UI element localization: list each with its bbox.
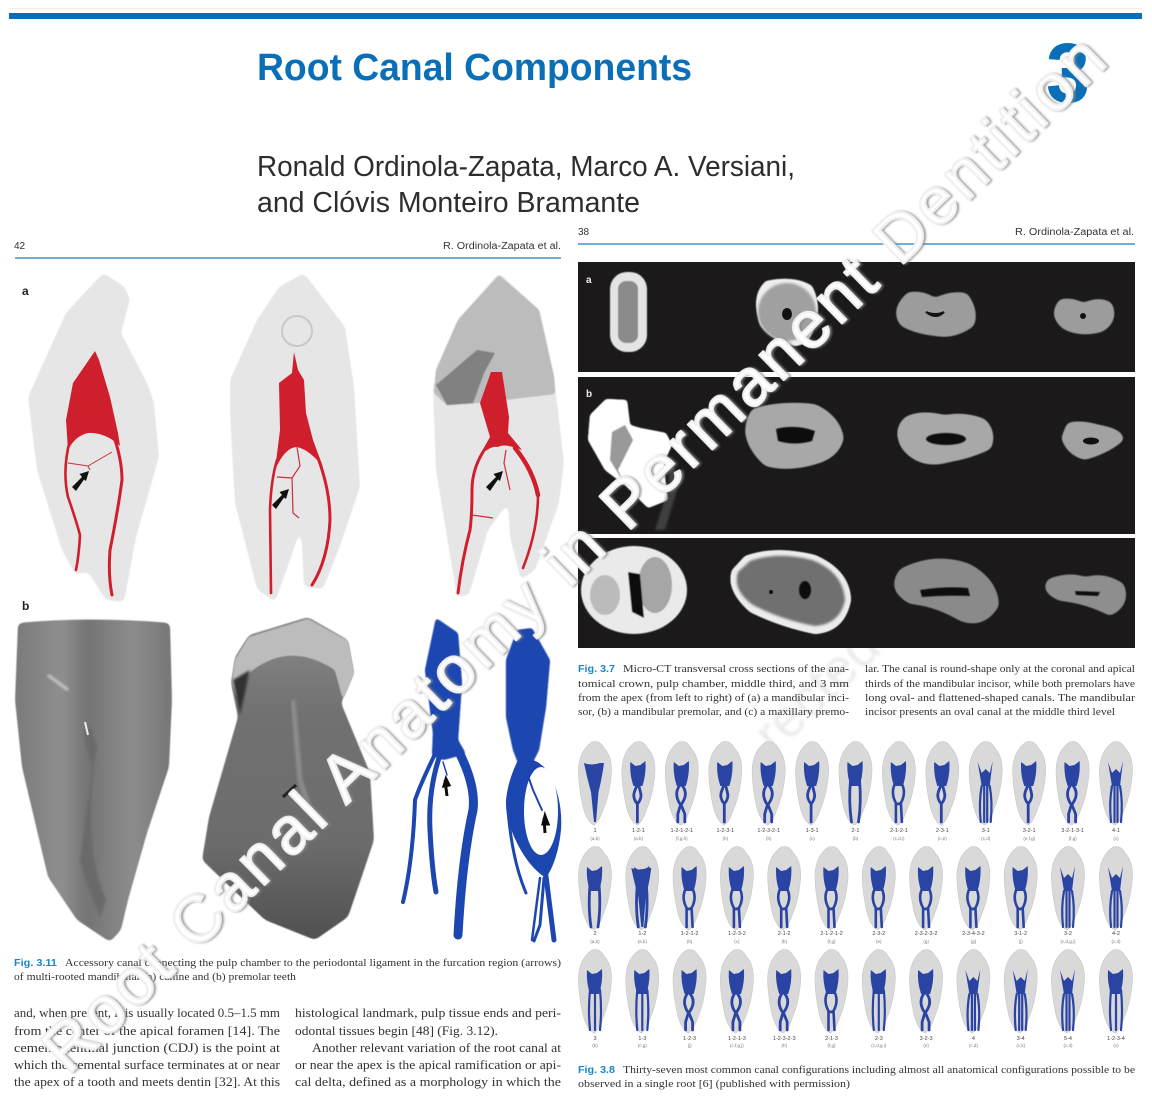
row 3 of configurations bbox=[578, 950, 1133, 1048]
caption: Fig. 3.8 bbox=[578, 1065, 1135, 1090]
label b: b bbox=[22, 599, 29, 613]
row 2 of configurations: (a,b) bbox=[590, 939, 600, 944]
caption: Fig. 3.7: tomical crown, pulp chamber, middle third, and 3 mm bbox=[578, 679, 849, 690]
row 2 of configurations: 4-2 bbox=[1112, 931, 1120, 937]
row 3 of configurations: (c,k) bbox=[1016, 1043, 1026, 1048]
blue canal 1 bbox=[403, 618, 473, 935]
body text right column bbox=[295, 1005, 561, 1089]
caption: Fig. 3.8: Thirty-seven most common canal configurations including almost all anatomical configurations possible to be bbox=[623, 1065, 1135, 1076]
chapter header band bbox=[9, 8, 1142, 19]
row 1 of configurations: (f,g,h) bbox=[676, 836, 688, 841]
caption: Fig. 3.7: from the apex (from left to right) of (a) a mandibular inci- bbox=[578, 693, 850, 704]
caption: Fig. 3.7: sor, (b) a mandibular premolar, and (c) a maxillary premo- bbox=[578, 707, 850, 718]
label a: a bbox=[22, 284, 29, 298]
label a: a bbox=[586, 275, 592, 286]
row 2 of configurations: (a,b) bbox=[638, 939, 647, 944]
row 1 of configurations: (a,b) bbox=[634, 836, 644, 841]
authors bbox=[257, 151, 795, 219]
row 1 of configurations: (b) bbox=[853, 836, 859, 841]
left page running head: R. Ordinola-Zapata et al. bbox=[443, 241, 561, 252]
row 2 of configurations: 3-1-2 bbox=[1014, 931, 1027, 937]
row 2 of configurations: 2-3-2 bbox=[872, 931, 885, 937]
row 1 of configurations: 1-2-1-2-1 bbox=[670, 828, 693, 834]
section: pulp chamber bbox=[730, 550, 851, 634]
canal configuration grid bbox=[578, 742, 1133, 1048]
dark grey tooth bbox=[202, 617, 374, 940]
row 3 of configurations: 4 bbox=[972, 1036, 975, 1042]
row 1 of configurations: (c) bbox=[1113, 836, 1119, 841]
row 3 of configurations: (c,d) bbox=[969, 1043, 978, 1048]
row 1 of configurations: (c,e) bbox=[938, 836, 947, 841]
section: apical bbox=[1061, 421, 1124, 460]
body text left column bbox=[14, 1005, 281, 1089]
body text right column: Another relevant variation of the root canal at bbox=[312, 1040, 561, 1055]
row 1 of configurations bbox=[578, 742, 1133, 841]
row 2 of configurations: (f,g) bbox=[827, 939, 836, 944]
row 3 of configurations: (c,f,g,j) bbox=[730, 1043, 744, 1048]
title: Root Canal Components bbox=[257, 47, 692, 89]
body text right column: or near the apex is the apical ramification or api- bbox=[295, 1057, 561, 1072]
caption: Fig. 3.11: Accessory canal connecting the pulp chamber to the periodontal ligament in the furcation region (arrows) bbox=[65, 958, 562, 969]
panel a: red canal teeth bbox=[22, 273, 564, 602]
row 1 of configurations: 1-3-1 bbox=[806, 828, 819, 834]
row 2 of configurations: (c,d,g,i) bbox=[1060, 939, 1076, 944]
caption: Fig. 3.7: lar. The canal is round-shape only at the coronal and apical bbox=[865, 664, 1135, 675]
caption: Fig. 3.8: Fig. 3.8 bbox=[578, 1065, 615, 1076]
row 1 of configurations: 2-1-2-1 bbox=[890, 828, 908, 834]
section: crown bbox=[610, 272, 647, 352]
row 2 of configurations: (b) bbox=[687, 939, 693, 944]
right page running head: R. Ordinola-Zapata et al. bbox=[1015, 227, 1134, 238]
body text right column: cal delta, defined as a morphology in which the bbox=[295, 1074, 561, 1089]
row 3 of configurations: (f,g) bbox=[827, 1043, 836, 1048]
row 3 of configurations: 2-1-3 bbox=[825, 1036, 838, 1042]
panel b: grey teeth and blue canals bbox=[15, 599, 561, 942]
row 2 of configurations: (g) bbox=[923, 939, 929, 944]
row 1 of configurations: 4-1 bbox=[1112, 828, 1120, 834]
row 3 of configurations: 3-2-3 bbox=[920, 1036, 933, 1042]
section: crown bbox=[581, 546, 687, 634]
row 1 of configurations: 2-1 bbox=[852, 828, 859, 834]
row 1 of configurations: (a,b) bbox=[590, 836, 600, 841]
body text left column: which the cemental surface terminates at or near bbox=[14, 1057, 281, 1072]
row 3 of configurations: (b) bbox=[592, 1043, 598, 1048]
row 2 of configurations: (j) bbox=[1019, 939, 1023, 944]
label b: b bbox=[586, 389, 592, 400]
row 3 of configurations: (c,d,g,i) bbox=[871, 1043, 887, 1048]
body text right column: odontal tissues begin [48] (Fig. 3.12). bbox=[295, 1023, 498, 1038]
row 2 of configurations: 1-2-3-2 bbox=[728, 931, 746, 937]
section: apical bbox=[1054, 298, 1114, 334]
body text left column: cementodentinal junction (CDJ) is the point at bbox=[14, 1040, 280, 1055]
row 2 of configurations: 3-2 bbox=[1064, 931, 1072, 937]
row 2 of configurations: (g) bbox=[971, 939, 977, 944]
row 2 of configurations: (c,d) bbox=[1112, 939, 1121, 944]
row 3 of configurations: 1-2-3-4 bbox=[1107, 1036, 1125, 1042]
row 1 of configurations: 3-2-1-3-1 bbox=[1061, 828, 1084, 834]
row 2 of configurations: 2-3-4-3-2 bbox=[962, 931, 985, 937]
row 2 of configurations: (c) bbox=[734, 939, 740, 944]
row 3 of configurations: 2-3 bbox=[875, 1036, 883, 1042]
row 1 of configurations: (c,d,i) bbox=[893, 836, 905, 841]
body text left column: the apex of a tooth and meets dentin [32]. At this bbox=[14, 1074, 280, 1089]
tooth 3 bbox=[433, 273, 564, 597]
row 2 of configurations: (b) bbox=[781, 939, 787, 944]
body text right column: histological landmark, pulp tissue ends and peri- bbox=[295, 1005, 561, 1020]
row 2 of configurations: (e) bbox=[876, 939, 882, 944]
row 3 of configurations: 5-4 bbox=[1064, 1036, 1072, 1042]
row 2 of configurations: 1-2-1-2 bbox=[681, 931, 698, 937]
row 1 of configurations: (c,d) bbox=[981, 836, 991, 841]
row 3 of configurations: (c) bbox=[1113, 1043, 1119, 1048]
chapter number: 3 bbox=[1046, 26, 1090, 120]
row 3 of configurations: 3 bbox=[593, 1036, 597, 1042]
row 3 of configurations: (e) bbox=[923, 1043, 929, 1048]
row 3 of configurations: 1-2-1-3 bbox=[728, 1036, 746, 1042]
row 3 of configurations: 1-3 bbox=[638, 1036, 646, 1042]
body text left column: and, when present, it is usually located 0.5–1.5 mm bbox=[14, 1005, 280, 1020]
row 1 of configurations: (e,f,g) bbox=[1023, 836, 1036, 841]
caption: Fig. 3.7: incisor presents an oval canal at the middle third level bbox=[865, 707, 1115, 718]
row 1 of configurations: (h) bbox=[723, 836, 729, 841]
diagonal watermark: Root Canal Anatomy in Permanent Dentition bbox=[26, 21, 1119, 1086]
row 1 of configurations: 1-2-3-2-1 bbox=[757, 828, 780, 834]
row 1 of configurations: (c) bbox=[809, 836, 815, 841]
row 1 of configurations: 3-2-1 bbox=[1023, 828, 1036, 834]
tooth 2 bbox=[230, 273, 360, 602]
section: middle third bbox=[897, 412, 993, 465]
tooth 1 bbox=[28, 273, 159, 602]
row 1 of configurations: 3-1 bbox=[982, 828, 990, 834]
caption: Fig. 3.7: Micro-CT transversal cross sections of the ana- bbox=[623, 664, 850, 675]
section: pulp chamber bbox=[756, 279, 818, 346]
row 2 of configurations: 2-1-2 bbox=[778, 931, 791, 937]
right page running head: 38 bbox=[578, 227, 590, 238]
row 2 of configurations: 2-1-2-1-2 bbox=[820, 931, 843, 937]
row 3 of configurations: 1-2-3 bbox=[683, 1036, 696, 1042]
faint background watermark: rected bbox=[742, 616, 891, 764]
row 3 of configurations: 3-4 bbox=[1017, 1036, 1025, 1042]
left page running head: 42 bbox=[14, 241, 26, 252]
caption: Fig. 3.7: long oval- and flattened-shaped canals. The mandibular bbox=[865, 693, 1136, 704]
micro-CT panel c bbox=[578, 538, 1135, 648]
caption: Fig. 3.11: of multi-rooted mandibular (a) canine and (b) premolar teeth bbox=[14, 972, 297, 983]
caption: Fig. 3.8: observed in a single root [6] (published with permission) bbox=[578, 1079, 851, 1090]
row 3 of configurations: (h) bbox=[781, 1043, 787, 1048]
row 1 of configurations: (f,g) bbox=[1069, 836, 1077, 841]
row 1 of configurations: (h) bbox=[766, 836, 772, 841]
row 3 of configurations: (j) bbox=[688, 1043, 692, 1048]
section: apical bbox=[1045, 574, 1126, 616]
caption: Fig. 3.11 bbox=[14, 958, 562, 983]
left page running head bbox=[14, 241, 561, 259]
section: pulp chamber bbox=[745, 403, 844, 469]
section: middle third bbox=[896, 292, 976, 337]
row 3 of configurations: (c,g) bbox=[638, 1043, 647, 1048]
caption: Fig. 3.7 bbox=[578, 664, 1136, 718]
micro-CT panel a bbox=[578, 262, 1135, 372]
row 1 of configurations: 1-2-1 bbox=[632, 828, 645, 834]
row 1 of configurations: 1-2-3-1 bbox=[716, 828, 734, 834]
row 3 of configurations: 1-2-3-2-3 bbox=[773, 1036, 796, 1042]
row 1 of configurations: 1 bbox=[593, 828, 597, 834]
section: crown bbox=[588, 399, 680, 530]
row 2 of configurations: 2-3-2-3-2 bbox=[915, 931, 937, 937]
row 2 of configurations: 2 bbox=[593, 931, 597, 937]
authors: Ronald Ordinola-Zapata, Marco A. Versiani, bbox=[257, 151, 795, 183]
row 2 of configurations: 1-2 bbox=[638, 931, 646, 937]
caption: Fig. 3.7: thirds of the mandibular incisor, while both premolars have bbox=[865, 679, 1135, 690]
row 2 of configurations bbox=[578, 847, 1133, 944]
caption: Fig. 3.7: Fig. 3.7 bbox=[578, 664, 615, 675]
section: middle third bbox=[894, 559, 999, 623]
blue canal 2 bbox=[506, 628, 561, 941]
row 1 of configurations: 2-3-1 bbox=[936, 828, 949, 834]
authors: and Clóvis Monteiro Bramante bbox=[257, 187, 640, 219]
caption: Fig. 3.11: Fig. 3.11 bbox=[14, 958, 57, 969]
micro-CT panel b bbox=[578, 377, 1135, 534]
row 3 of configurations: (c,d) bbox=[1064, 1043, 1073, 1048]
grey tooth bbox=[15, 620, 172, 942]
right page running head bbox=[578, 227, 1135, 245]
body text left column: from the center of the apical foramen [14]. The bbox=[14, 1023, 280, 1038]
